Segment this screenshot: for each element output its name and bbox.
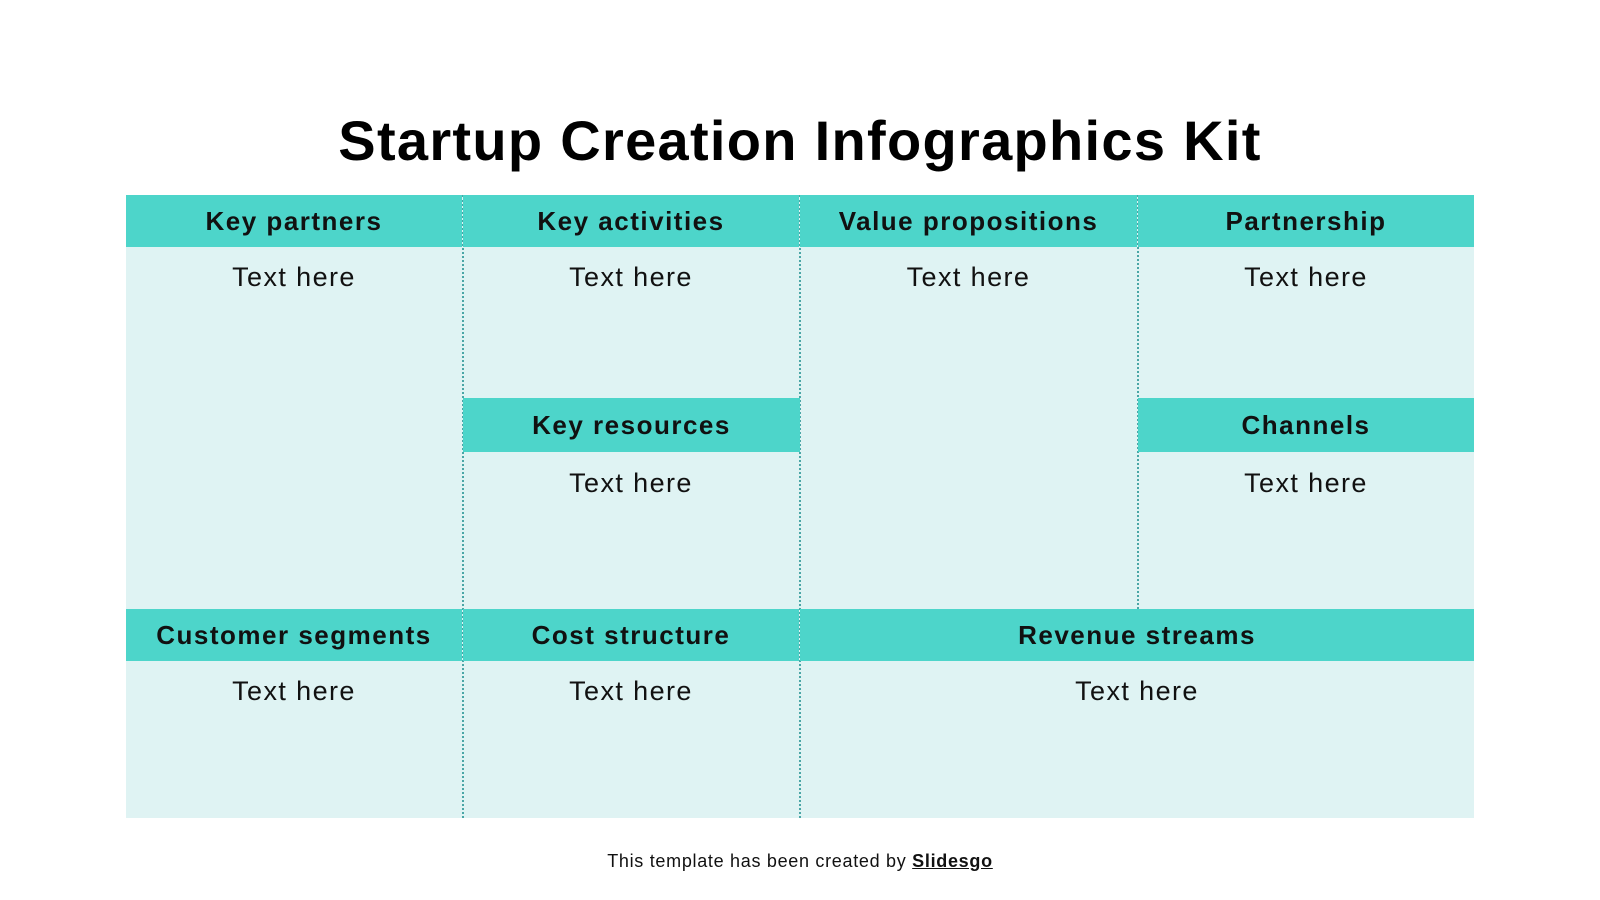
header: key resources — [463, 398, 800, 452]
header: cost structure: Cost structure — [532, 620, 730, 650]
text: key resources: Text here — [569, 468, 693, 498]
header: value propositions: Value propositions — [839, 206, 1098, 236]
header: channels — [1138, 398, 1474, 452]
header: key resources: Key resources — [532, 410, 731, 440]
text: key activities: Text here — [569, 262, 693, 292]
header: cost structure — [463, 609, 799, 661]
header: customer segments: Customer segments — [156, 620, 432, 650]
text: revenue streams: Text here — [1075, 676, 1199, 706]
header: key partners — [126, 195, 462, 247]
header: revenue streams: Revenue streams — [1018, 620, 1256, 650]
header: customer segments — [126, 609, 462, 661]
header: channels: Channels — [1241, 410, 1371, 440]
header: partnership: Partnership — [1226, 206, 1386, 236]
text: channels: Text here — [1244, 468, 1368, 498]
footer: This template has been created by Slidesgo — [607, 851, 993, 871]
text: customer segments: Text here — [232, 676, 356, 706]
header: key activities: Key activities — [537, 206, 725, 236]
header: revenue streams — [800, 609, 1474, 661]
title: Startup Creation Infographics Kit — [338, 109, 1262, 172]
header: key activities — [463, 195, 799, 247]
header: partnership — [1138, 195, 1474, 247]
text: partnership: Text here — [1244, 262, 1368, 292]
header: value propositions — [800, 195, 1137, 247]
text: value propositions: Text here — [907, 262, 1030, 292]
header: key partners: Key partners — [206, 206, 382, 236]
canvas background — [126, 195, 1474, 818]
text: key partners: Text here — [232, 262, 356, 292]
text: cost structure: Text here — [569, 676, 693, 706]
